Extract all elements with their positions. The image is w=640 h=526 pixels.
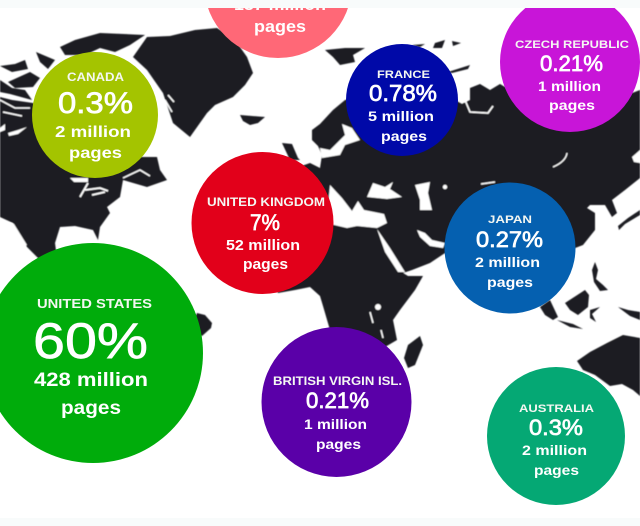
- bubble: British Virgin Islands: 0.21%: [306, 388, 369, 413]
- bubble: United States: 60%: [33, 313, 148, 369]
- bubble: British Virgin Islands: [262, 327, 412, 477]
- top edge strip: [0, 0, 640, 8]
- bubble: British Virgin Islands: BRITISH VIRGIN ISL.: [273, 376, 402, 388]
- bubble: United States: UNITED STATES: [37, 296, 152, 311]
- bubble: United States: 428 million: [34, 370, 148, 391]
- bubble: Canada: 0.3%: [58, 87, 133, 120]
- bubble: Czech Republic: CZECH REPUBLIC: [515, 39, 629, 51]
- bubble: United Kingdom: [192, 152, 334, 294]
- bubble: Canada: [32, 52, 158, 178]
- bubble: Czech Republic: pages: [549, 97, 595, 113]
- bubble: Canada: pages: [69, 145, 122, 162]
- bubble: Japan: [444, 182, 576, 314]
- bubble: Japan: 0.27%: [476, 227, 543, 252]
- bubble: pink (cropped): pages: [254, 18, 306, 36]
- bottom edge strip: [0, 518, 640, 526]
- bubble: Japan: 2 million: [475, 254, 540, 270]
- bubble: Australia: pages: [534, 462, 579, 478]
- bubble: France: pages: [381, 128, 427, 144]
- world map: [0, 28, 640, 396]
- bubble: Canada: CANADA: [67, 70, 124, 84]
- bubble: British Virgin Islands: pages: [316, 436, 361, 452]
- bubble: United Kingdom: pages: [243, 257, 288, 273]
- bubble: United States: [0, 243, 203, 463]
- bubble: Japan: pages: [487, 274, 533, 290]
- bubble: Australia: 0.3%: [529, 415, 583, 440]
- bubble: Australia: AUSTRALIA: [519, 403, 594, 415]
- bubble: United Kingdom: UNITED KINGDOM: [207, 197, 325, 209]
- bubble: Czech Republic: 0.21%: [540, 51, 603, 76]
- bubble: France: 5 million: [368, 108, 434, 124]
- bubble: France: [346, 44, 458, 156]
- bubble: France: 0.78%: [369, 80, 437, 106]
- bubble: Czech Republic: [500, 0, 640, 132]
- bubble: United Kingdom: 52 million: [226, 237, 300, 254]
- bubble: Australia: 2 million: [522, 442, 587, 458]
- bubble: United States: pages: [61, 398, 121, 419]
- bubble: Canada: 2 million: [55, 124, 131, 141]
- bubble: Czech Republic: 1 million: [538, 78, 601, 94]
- bubble: France: FRANCE: [377, 69, 430, 81]
- bubble: British Virgin Islands: 1 million: [304, 416, 367, 432]
- bubble: United Kingdom: 7%: [250, 210, 280, 235]
- bubble: pink (cropped): [204, 0, 352, 58]
- bubble: Australia: [487, 367, 625, 505]
- bubble: Japan: JAPAN: [488, 214, 532, 226]
